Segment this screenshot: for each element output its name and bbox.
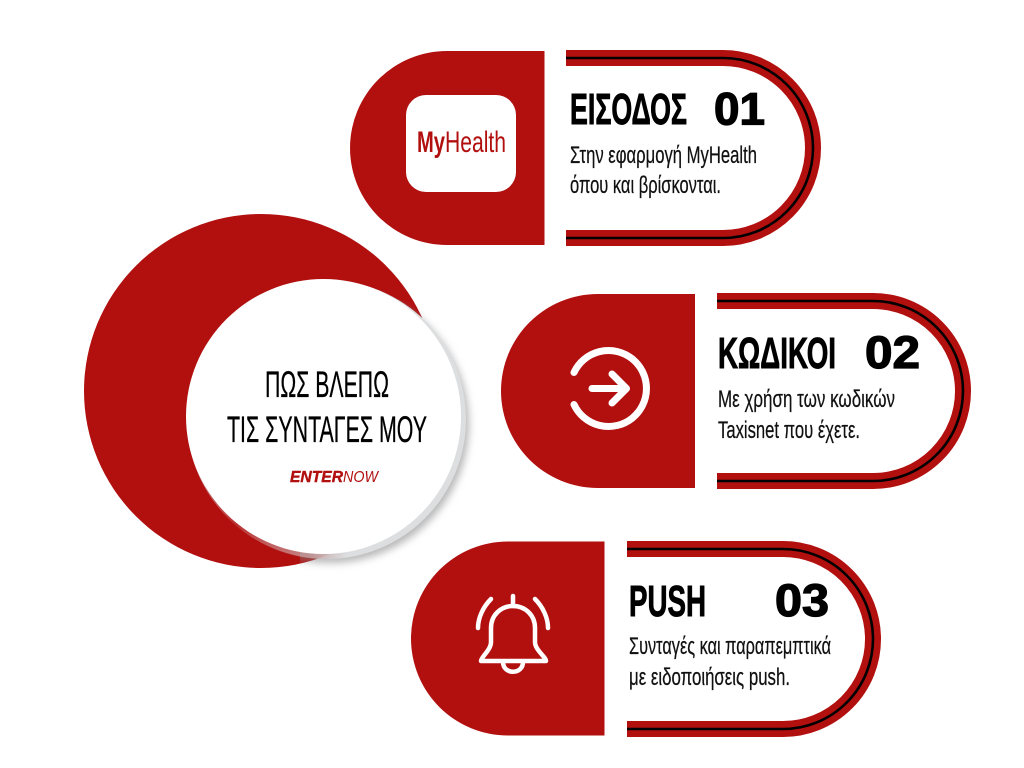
panel: central circle (84, 214, 469, 568)
heading 02: ΚΩΔΙΚΟΙ (718, 329, 836, 378)
ENTERNOW logo (290, 469, 380, 486)
panel: step 01 (350, 51, 813, 245)
white disc (186, 279, 461, 554)
red half-pill 03 (411, 542, 604, 736)
number 01: 01 (714, 84, 765, 134)
ENTERNOW logo: NOW (343, 469, 380, 486)
icon: MyHealth app: My (417, 126, 445, 159)
text 03 (629, 633, 831, 691)
text 02: Taxisnet που έχετε. (718, 417, 860, 444)
heading 01: ΕΙΣΟΔΟΣ (570, 85, 687, 134)
red crescent circle (84, 214, 438, 568)
text 02: Με χρήση των κωδικών (718, 386, 895, 413)
circle grey rim (187, 280, 466, 559)
text 01 (570, 142, 757, 199)
icon: MyHealth app: Health (445, 126, 506, 159)
text 01: όπου και βρίσκονται. (570, 172, 721, 199)
icon: bell (478, 596, 548, 672)
ENTERNOW logo: ENTER (290, 469, 343, 486)
number 02: 02 (865, 327, 920, 378)
red half-pill 01 (350, 51, 544, 245)
text 03: με ειδοποιήσεις push. (629, 664, 790, 691)
outlined pill band 03 (627, 549, 873, 729)
infographic canvas (84, 50, 971, 737)
icon: login arrow (574, 350, 646, 427)
text 02 (718, 386, 895, 444)
red half-pill 02 (501, 294, 695, 488)
text 03: Συνταγές και παραπεμπτικά (629, 633, 831, 660)
panel: step 03 (411, 542, 873, 736)
central title: ΤΙΣ ΣΥΝΤΑΓΕΣ ΜΟΥ (227, 409, 427, 450)
outlined pill band 01 (566, 58, 813, 238)
circle soft shadow (300, 300, 474, 568)
text 01: Στην εφαρμογή MyHealth (570, 142, 757, 169)
outlined pill band 02 (717, 301, 963, 481)
panel: step 02 (501, 294, 963, 488)
heading 03: PUSH (629, 577, 706, 626)
central title (227, 364, 427, 450)
central title: ΠΩΣ ΒΛΕΠΩ (265, 364, 389, 405)
number 03: 03 (775, 575, 829, 626)
icon: MyHealth app (406, 95, 516, 192)
